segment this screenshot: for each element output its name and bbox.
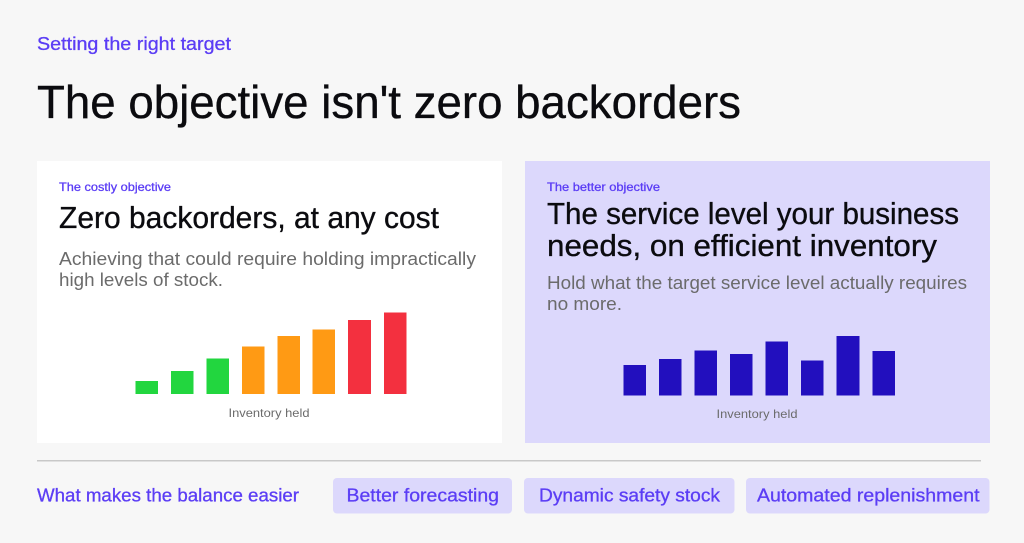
chip: dynamic safety stock: Dynamic safety stock bbox=[539, 486, 721, 506]
panel: costly objective bbox=[37, 161, 502, 443]
chart axis label: Inventory held bbox=[716, 407, 798, 421]
panel heading bbox=[547, 197, 959, 263]
panel heading: The service level your business bbox=[547, 197, 959, 231]
bar chart: steady inventory bbox=[624, 336, 895, 396]
chip: better forecasting: Better forecasting bbox=[346, 486, 499, 506]
panel label: The better objective bbox=[547, 180, 660, 194]
panel heading: Zero backorders, at any cost bbox=[59, 201, 440, 235]
panel description: high levels of stock. bbox=[59, 269, 223, 290]
bar chart: rising inventory bbox=[136, 312, 406, 394]
panel label: The costly objective bbox=[59, 180, 171, 194]
panel description: no more. bbox=[547, 293, 622, 314]
chip: automated replenishment: Automated replenishment bbox=[757, 486, 980, 506]
panel description bbox=[547, 272, 967, 314]
eyebrow: Setting the right target bbox=[37, 34, 231, 54]
chip: automated replenishment bbox=[746, 478, 990, 514]
chip: better forecasting bbox=[333, 478, 512, 514]
panel description bbox=[59, 248, 477, 290]
panel description: Achieving that could require holding impractically bbox=[59, 248, 477, 269]
chip: dynamic safety stock bbox=[524, 478, 734, 514]
panel heading: needs, on efficient inventory bbox=[547, 229, 938, 263]
chart axis label: Inventory held bbox=[228, 406, 310, 420]
panel: better objective bbox=[525, 161, 990, 443]
panel description: Hold what the target service level actually requires bbox=[547, 272, 967, 293]
title: The objective isn't zero backorders bbox=[37, 76, 741, 128]
footer label: What makes the balance easier bbox=[37, 486, 299, 506]
